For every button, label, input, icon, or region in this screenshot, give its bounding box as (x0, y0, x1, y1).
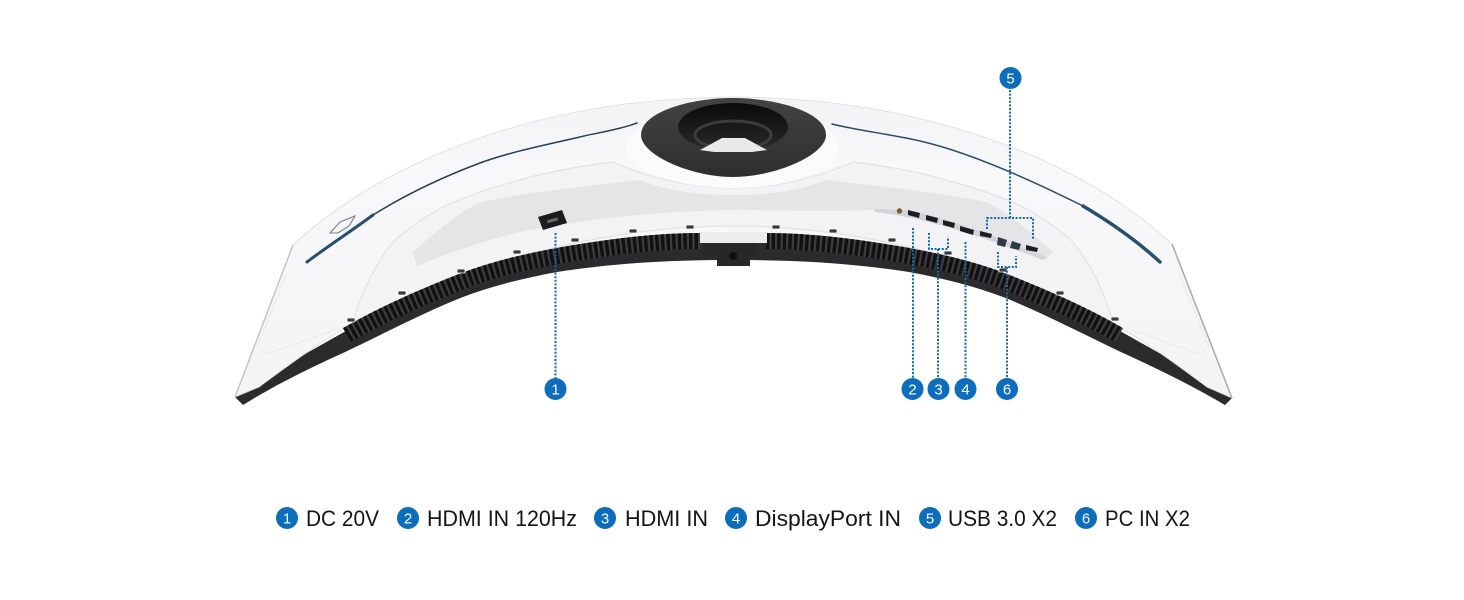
legend item: DC 20V: DC 20V (306, 506, 379, 531)
leader line 2 (912, 228, 914, 378)
io panel (875, 209, 1046, 260)
marker 3 (928, 378, 950, 400)
marker 2 (902, 378, 924, 400)
recessed panel (352, 162, 1114, 325)
wing panel seam right (1129, 273, 1209, 354)
clips (347, 225, 1119, 322)
marker 5: 5 (1006, 70, 1015, 88)
marker 3: 3 (934, 382, 943, 398)
legend item: DisplayPort IN: 4 (732, 510, 740, 528)
leader line 5 (987, 90, 1033, 240)
ports (897, 208, 1038, 252)
legend item: HDMI IN 120Hz: 2 (404, 510, 412, 528)
legend item: USB 3.0 X2: USB 3.0 X2 (948, 506, 1057, 531)
marker 1 (544, 378, 566, 400)
side edge right (1172, 244, 1232, 398)
legend item: PC IN X2: PC IN X2 (1105, 506, 1190, 531)
monitor rear view (235, 97, 1232, 405)
marker 5 (1000, 67, 1022, 89)
hub bracket (700, 138, 767, 152)
marker 2: 2 (908, 382, 917, 398)
legend item: HDMI IN: 3 (601, 510, 609, 528)
white rear body (235, 97, 1232, 398)
recessed grey surface (413, 180, 1053, 266)
legend item: HDMI IN: HDMI IN (625, 506, 708, 531)
leader line 4 (964, 242, 966, 378)
stand hub (641, 98, 826, 177)
dark bottom band (235, 225, 1232, 405)
stand mount (700, 232, 767, 266)
legend item: DC 20V (276, 506, 379, 531)
marker 6 (996, 378, 1018, 400)
leader line 6 (998, 252, 1016, 378)
marker 1: 1 (551, 382, 560, 398)
power port (538, 210, 567, 230)
side edge left (235, 245, 293, 397)
logo mark (330, 216, 355, 233)
legend item: DisplayPort IN: DisplayPort IN (755, 506, 901, 531)
hub opening (678, 103, 788, 151)
accent line right (832, 124, 1160, 262)
legend item: HDMI IN 120Hz: HDMI IN 120Hz (427, 506, 577, 531)
marker 4: 4 (961, 382, 970, 398)
wing panel seam left (257, 273, 337, 354)
legend item: DC 20V: 1 (283, 510, 291, 528)
legend item: USB 3.0 X2: 5 (926, 510, 934, 528)
stand hub rim (627, 106, 839, 188)
hub inner ring (695, 121, 771, 149)
marker 4 (954, 378, 976, 400)
legend item: PC IN X2 (1075, 506, 1190, 531)
vent slots (347, 241, 1119, 335)
leader line 3 (929, 233, 948, 378)
legend (276, 506, 1190, 531)
accent line left (307, 123, 637, 262)
marker 6: 6 (1003, 382, 1011, 398)
leader line 1 (554, 233, 556, 378)
legend item: PC IN X2: 6 (1082, 510, 1090, 528)
